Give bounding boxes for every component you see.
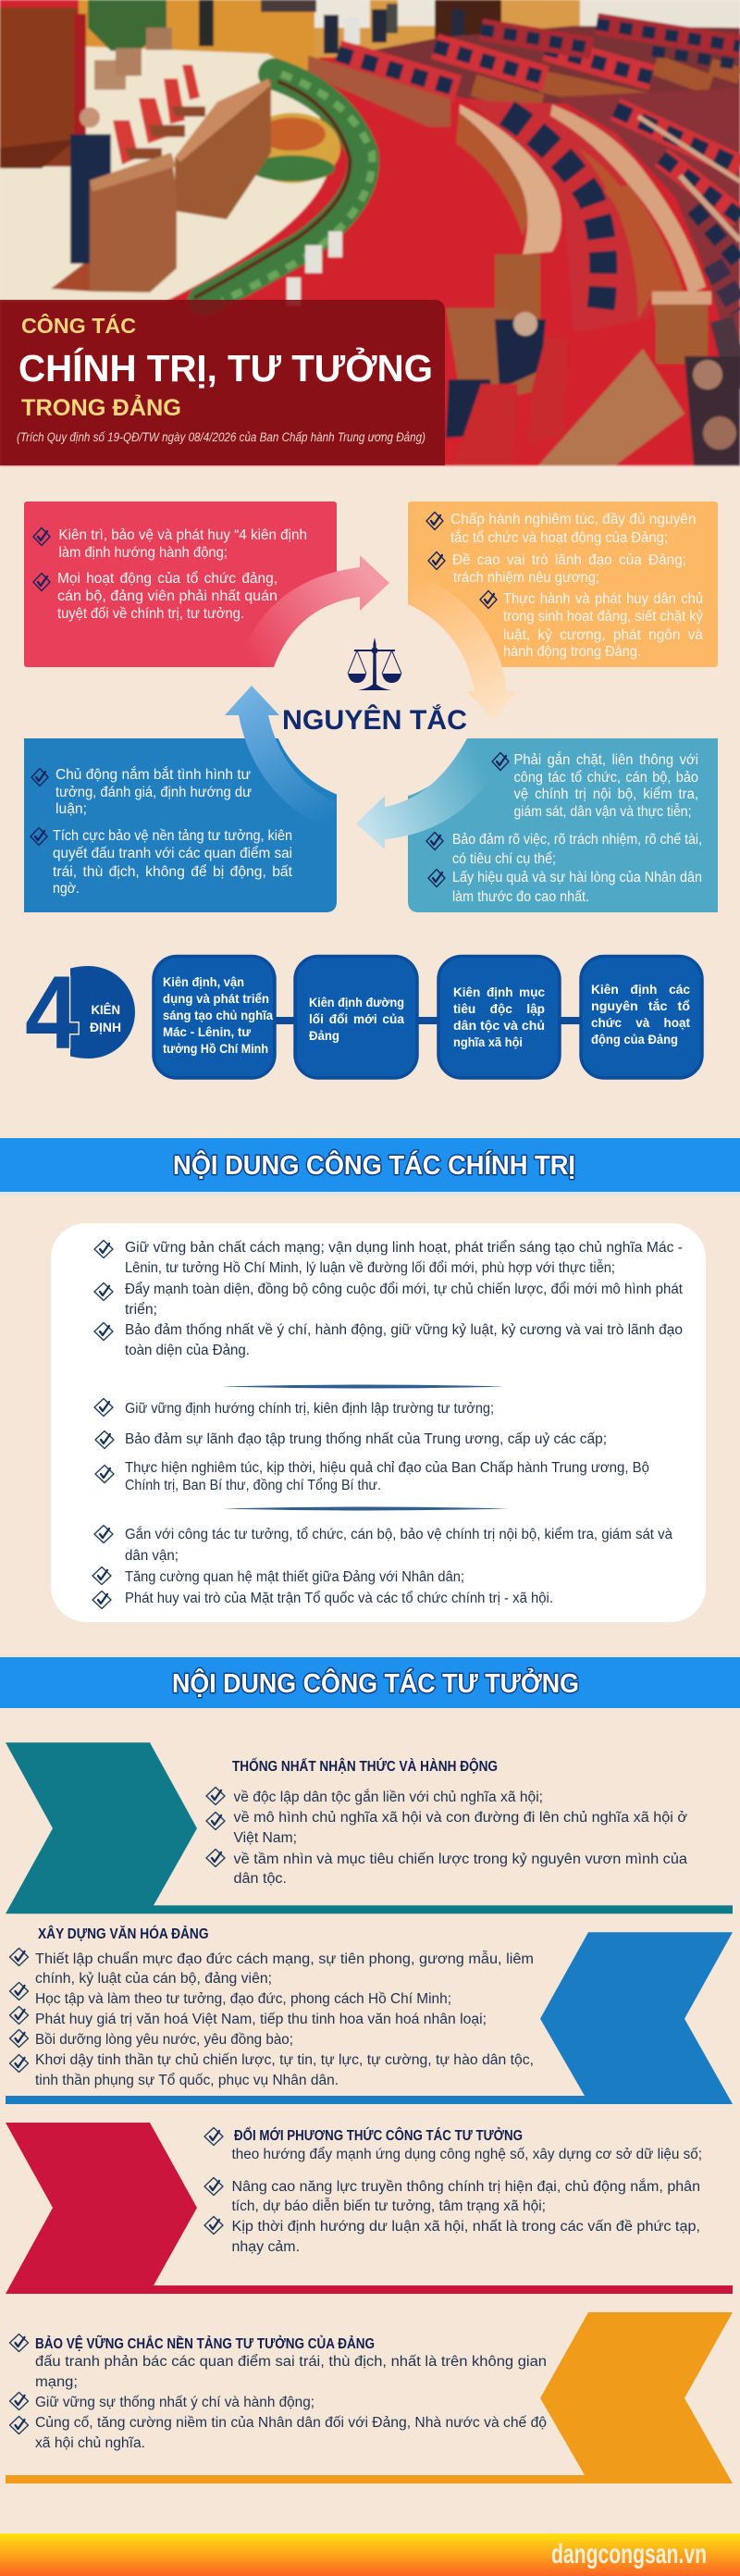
card 4: động của Đảng <box>591 1032 678 1046</box>
heading band: nội dung công tác tư tưởng: NỘI DUNG CÔNG TÁC TƯ TƯỞNG <box>172 1668 579 1699</box>
item: Lênin, tư tưởng Hồ Chí Minh, lý luận về đường lối đổi mới, phù hợp với thực tiễn; <box>125 1260 615 1276</box>
item: Phát huy giá trị văn hoá Việt Nam, tiếp thu tinh hoa văn hoá nhân loại; <box>35 2012 487 2027</box>
item: giám sát, dân vận và thực tiễn; <box>514 804 692 820</box>
item: Khơi dậy tinh thần tự chủ chiến lược, tự tin, tự lực, tự cường, tự hào dân tộc, <box>35 2052 534 2068</box>
third curved desk <box>578 148 659 319</box>
heading band: nội dung công tác tư tưởng <box>0 1657 740 1708</box>
item: Chủ động nắm bắt tình hình tư <box>56 767 251 783</box>
item <box>426 832 702 867</box>
item: heading: ĐỔI MỚI PHƯƠNG THỨC CÔNG TÁC TƯ TƯỞNG <box>234 2127 523 2144</box>
item: chính, kỷ luật của cán bộ, đảng viên; <box>35 1971 272 1987</box>
chevron: orange <box>6 2312 733 2483</box>
item <box>204 2217 700 2255</box>
first front desk <box>308 56 450 127</box>
card 4: Kiên định các <box>591 982 690 997</box>
subtitle: (Trích Quy định số 19-QĐ/TW ngày 08/4/2026 của Ban Chấp hành Trung ương Đảng) <box>17 430 426 444</box>
badge: number 4: 4 <box>25 955 79 1071</box>
panel: political work content <box>51 1223 706 1622</box>
item: dân tộc. <box>233 1871 287 1887</box>
item: Tích cực bảo vệ nền tảng tư tưởng, kiên <box>53 828 292 844</box>
item: tích, dự báo diễn biến tư tưởng, tâm trạng xã hội; <box>231 2198 546 2214</box>
item: Học tập và làm theo tư tưởng, đạo đức, phong cách Hồ Chí Minh; <box>35 1991 451 2007</box>
item <box>9 2052 534 2088</box>
arrow: orange to teal <box>408 572 517 720</box>
second curved desk <box>456 105 541 236</box>
item: về mô hình chủ nghĩa xã hội và con đường đi lên chủ nghĩa xã hội ở <box>233 1810 687 1826</box>
item <box>428 870 702 905</box>
panel: đổi mới phương thức <box>6 2123 733 2294</box>
footer band <box>0 2533 740 2576</box>
chevron: blue <box>6 1932 733 2104</box>
item <box>95 1460 649 1493</box>
item <box>33 571 278 622</box>
item <box>94 1240 683 1276</box>
item <box>94 1322 683 1358</box>
item: Đề cao vai trò lãnh đạo của Đảng; <box>452 552 686 568</box>
item: Giữ vững bản chất cách mạng; vận dụng linh hoạt, phát triển sáng tạo chủ nghĩa Mác - <box>125 1240 683 1256</box>
item: có tiêu chí cụ thể; <box>452 851 556 867</box>
item: luận; <box>56 801 87 817</box>
title panel <box>0 300 445 465</box>
heading band: nội dung công tác chính trị: NỘI DUNG CÔNG TÁC CHÍNH TRỊ <box>173 1150 575 1181</box>
item: Chính trị, Ban Bí thư, đồng chí Tổng Bí thư. <box>125 1478 381 1493</box>
card 4: nguyên tắc tổ <box>591 997 690 1013</box>
item: Giữ vững định hướng chính trị, kiên định lập trường tư tưởng; <box>125 1401 494 1417</box>
item: dân vận; <box>125 1548 179 1564</box>
badge: label: KIÊN <box>91 1001 120 1017</box>
audience right rows <box>555 88 740 389</box>
title line 3: TRONG ĐẢNG <box>21 393 181 421</box>
item: Tăng cường quan hệ mật thiết giữa Đảng với Nhân dân; <box>125 1569 464 1585</box>
card 4: chức và hoạt <box>591 1015 690 1030</box>
heading: THỐNG NHẤT NHẬN THỨC VÀ HÀNH ĐỘNG <box>232 1758 498 1775</box>
photographers <box>324 4 464 54</box>
item <box>206 1849 687 1887</box>
badge: half disc <box>70 966 135 1059</box>
card 3: dân tộc và chủ <box>453 1018 545 1033</box>
heading: nguyên tắc: NGUYÊN TẮC <box>282 704 467 736</box>
item: nhạy cảm. <box>231 2239 300 2255</box>
item: triển; <box>125 1302 157 1318</box>
arrow: red to orange <box>242 555 389 667</box>
chairs on platform <box>113 65 200 165</box>
card 3: tiêu độc lập <box>453 1001 545 1016</box>
panel: 4 kiên định <box>25 955 702 1078</box>
audience upper rows <box>333 26 740 104</box>
item: Củng cố, tăng cường niềm tin của Nhân dân đối với Đảng, Nhà nước và chế độ <box>35 2415 547 2431</box>
icon: scales <box>348 638 401 690</box>
center circle <box>269 590 480 801</box>
item: trái, thù địch, không để bị động, bất <box>53 864 293 880</box>
item: Việt Nam; <box>233 1830 297 1846</box>
panel: thống nhất nhận thức <box>6 1742 733 1913</box>
item: Bảo đảm rõ việc, rõ trách nhiệm, rõ chế tài, <box>452 832 702 848</box>
arrow: blue to red <box>225 686 337 831</box>
list: blue box <box>31 767 293 897</box>
item <box>9 1982 451 2007</box>
heading band: nội dung công tác chính trị <box>0 1138 740 1195</box>
item: xã hội chủ nghĩa. <box>35 2435 145 2451</box>
card 3: Kiên định mục <box>453 985 545 999</box>
cabinet <box>0 7 78 167</box>
panel background <box>51 1223 706 1622</box>
item: Phát huy vai trò của Mặt trận Tổ quốc và các tổ chức chính trị - xã hội. <box>125 1591 553 1606</box>
item: hành động trong Đảng. <box>503 644 641 660</box>
item <box>492 752 698 820</box>
item: Thực hiện nghiêm túc, kịp thời, hiệu quả chỉ đạo của Ban Chấp hành Trung ương, Bộ <box>125 1460 649 1476</box>
item <box>204 2178 700 2214</box>
item: heading: BẢO VỆ VỮNG CHẮC NỀN TẢNG TƯ TƯỞNG CỦA ĐẢNG <box>35 2335 375 2352</box>
platform <box>0 46 331 301</box>
item <box>480 590 703 660</box>
potted plants <box>88 0 166 51</box>
item <box>94 1282 684 1318</box>
item: Kiên trì, bảo vệ và phát huy “4 kiên định <box>59 527 307 543</box>
item: heading <box>204 2127 702 2162</box>
item: Bồi dưỡng lòng yêu nước, yêu đồng bào; <box>35 2032 293 2048</box>
chevron: teal <box>6 1742 733 1913</box>
heading: XÂY DỰNG VĂN HÓA ĐẢNG <box>38 1926 209 1942</box>
card 2: Kiên định đường <box>309 995 404 1009</box>
list: red box <box>33 527 307 622</box>
item: heading: mạng; <box>35 2374 78 2390</box>
card 1: sáng tạo chủ nghĩa <box>163 1008 273 1022</box>
title line 1: CÔNG TÁC <box>21 313 136 338</box>
item: luật, kỷ cương, phát ngôn và <box>503 627 703 643</box>
item: trong sinh hoạt đảng, siết chặt kỷ <box>503 609 703 625</box>
item: heading: theo hướng đẩy mạnh ứng dụng công nghệ số, xây dựng cơ sở dữ liệu số; <box>231 2147 702 2162</box>
card 3 <box>438 957 560 1078</box>
item: Đẩy mạnh toàn diện, đồng bộ công cuộc đổi mới, tự chủ chiến lược, đổi mới mô hình phát <box>125 1282 684 1297</box>
item: về tầm nhìn và mục tiêu chiến lược trong kỷ nguyên vươn mình của <box>233 1852 687 1867</box>
panel background <box>0 300 445 465</box>
item: ngờ. <box>53 881 80 897</box>
item: làm thước đo cao nhất. <box>452 889 589 905</box>
panel: principles cycle <box>24 502 718 912</box>
item: Nâng cao năng lực truyền thông chính trị hiện đại, chủ động nắm, phân <box>231 2179 700 2195</box>
item: vệ chính trị nội bộ, kiểm tra, <box>514 786 698 802</box>
item: làm định hướng hành động; <box>59 545 228 561</box>
item: Giữ vững sự thống nhất ý chí và hành động; <box>35 2395 314 2410</box>
title line 2: CHÍNH TRỊ, TƯ TƯỞNG <box>18 347 433 390</box>
card 2 <box>295 957 417 1078</box>
card 1: Kiên định, vận <box>163 974 244 989</box>
item: Phải gắn chặt, liên thông với <box>514 752 698 768</box>
item <box>428 551 686 586</box>
item <box>31 827 293 897</box>
item <box>206 1810 687 1846</box>
item: tinh thần phụng sự Tổ quốc, phục vụ Nhân dân. <box>35 2073 339 2088</box>
badge: label: ĐỊNH <box>90 1020 121 1034</box>
box: red <box>24 502 337 667</box>
chevron: red <box>6 2123 733 2294</box>
item: quyết đấu tranh với các quan điểm sai <box>53 846 292 861</box>
card 2: lối đổi mới của <box>309 1011 404 1026</box>
item: Gắn với công tác tư tưởng, tổ chức, cán bộ, bảo vệ chính trị nội bộ, kiểm tra, giám sát và <box>125 1527 672 1542</box>
item: trách nhiệm nêu gương; <box>453 570 599 586</box>
item <box>94 1525 672 1564</box>
card 1: tưởng Hồ Chí Minh <box>163 1041 268 1056</box>
item <box>9 1949 534 1987</box>
badge: label <box>90 1001 121 1034</box>
item <box>31 767 252 817</box>
hero photo: party congress hall <box>0 0 740 465</box>
item: cán bộ, đảng viên phải nhất quán <box>57 588 278 604</box>
card 3: nghĩa xã hội <box>453 1034 523 1049</box>
box: teal <box>408 738 718 912</box>
item: tắc tổ chức và hoạt động của Đảng; <box>450 530 668 546</box>
item <box>426 512 696 546</box>
item: Kịp thời định hướng dư luận xã hội, nhất là trong các vấn đề phức tạp, <box>231 2219 700 2235</box>
item: tưởng, đánh giá, định hướng dư <box>56 785 252 800</box>
item: công tác tổ chức, cán bộ, bảo <box>514 770 698 786</box>
box: orange <box>408 502 718 667</box>
item <box>9 2415 547 2451</box>
central desk <box>175 79 271 219</box>
connector bar <box>268 1017 587 1024</box>
item: Thực hành và phát huy dân chủ <box>503 591 703 607</box>
card 1: Mác - Lênin, tư <box>163 1024 252 1039</box>
item: heading: đấu tranh phản bác các quan điểm sai trái, thù địch, nhất là trên không gian <box>35 2354 547 2370</box>
card 4 <box>581 957 702 1078</box>
panel: bảo vệ nền tảng tư tưởng <box>6 2312 733 2483</box>
card 1 <box>154 957 275 1078</box>
audience middle rows <box>467 100 666 333</box>
item: về độc lập dân tộc gắn liền với chủ nghĩa xã hội; <box>233 1790 543 1805</box>
item: Chấp hành nghiêm túc, đầy đủ nguyên <box>450 512 696 527</box>
hall back wall <box>79 0 740 70</box>
item: Lấy hiệu quả và sự hài lòng của Nhân dân <box>452 870 702 886</box>
list: teal box <box>426 752 702 905</box>
lower right desks and people <box>446 308 546 407</box>
arrow: teal to blue <box>356 738 493 849</box>
item <box>33 527 307 561</box>
item: Bảo đảm sự lãnh đạo tập trung thống nhất của Trung ương, cấp uỷ các cấp; <box>125 1431 607 1447</box>
card 1: dụng và phát triển <box>163 991 269 1006</box>
panel: xây dựng văn hóa đảng <box>6 1926 733 2104</box>
item: toàn diện của Đảng. <box>125 1343 250 1358</box>
item: Bảo đảm thống nhất về ý chí, hành động, giữ vững kỷ luật, kỷ cương và vai trò lãnh đạo <box>125 1322 683 1338</box>
item: Thiết lập chuẩn mực đạo đức cách mạng, sự tiên phong, gương mẫu, liêm <box>35 1951 534 1967</box>
card 2: Đảng <box>309 1028 339 1043</box>
item: tuyệt đối về chính trị, tư tưởng. <box>57 606 244 622</box>
plant and flower strip <box>204 74 364 301</box>
box: blue <box>24 738 337 912</box>
item: Mọi hoạt động của tổ chức đảng, <box>57 571 278 587</box>
item: heading <box>9 2334 547 2390</box>
speaker and podium <box>51 259 92 291</box>
list: orange box <box>426 512 703 660</box>
